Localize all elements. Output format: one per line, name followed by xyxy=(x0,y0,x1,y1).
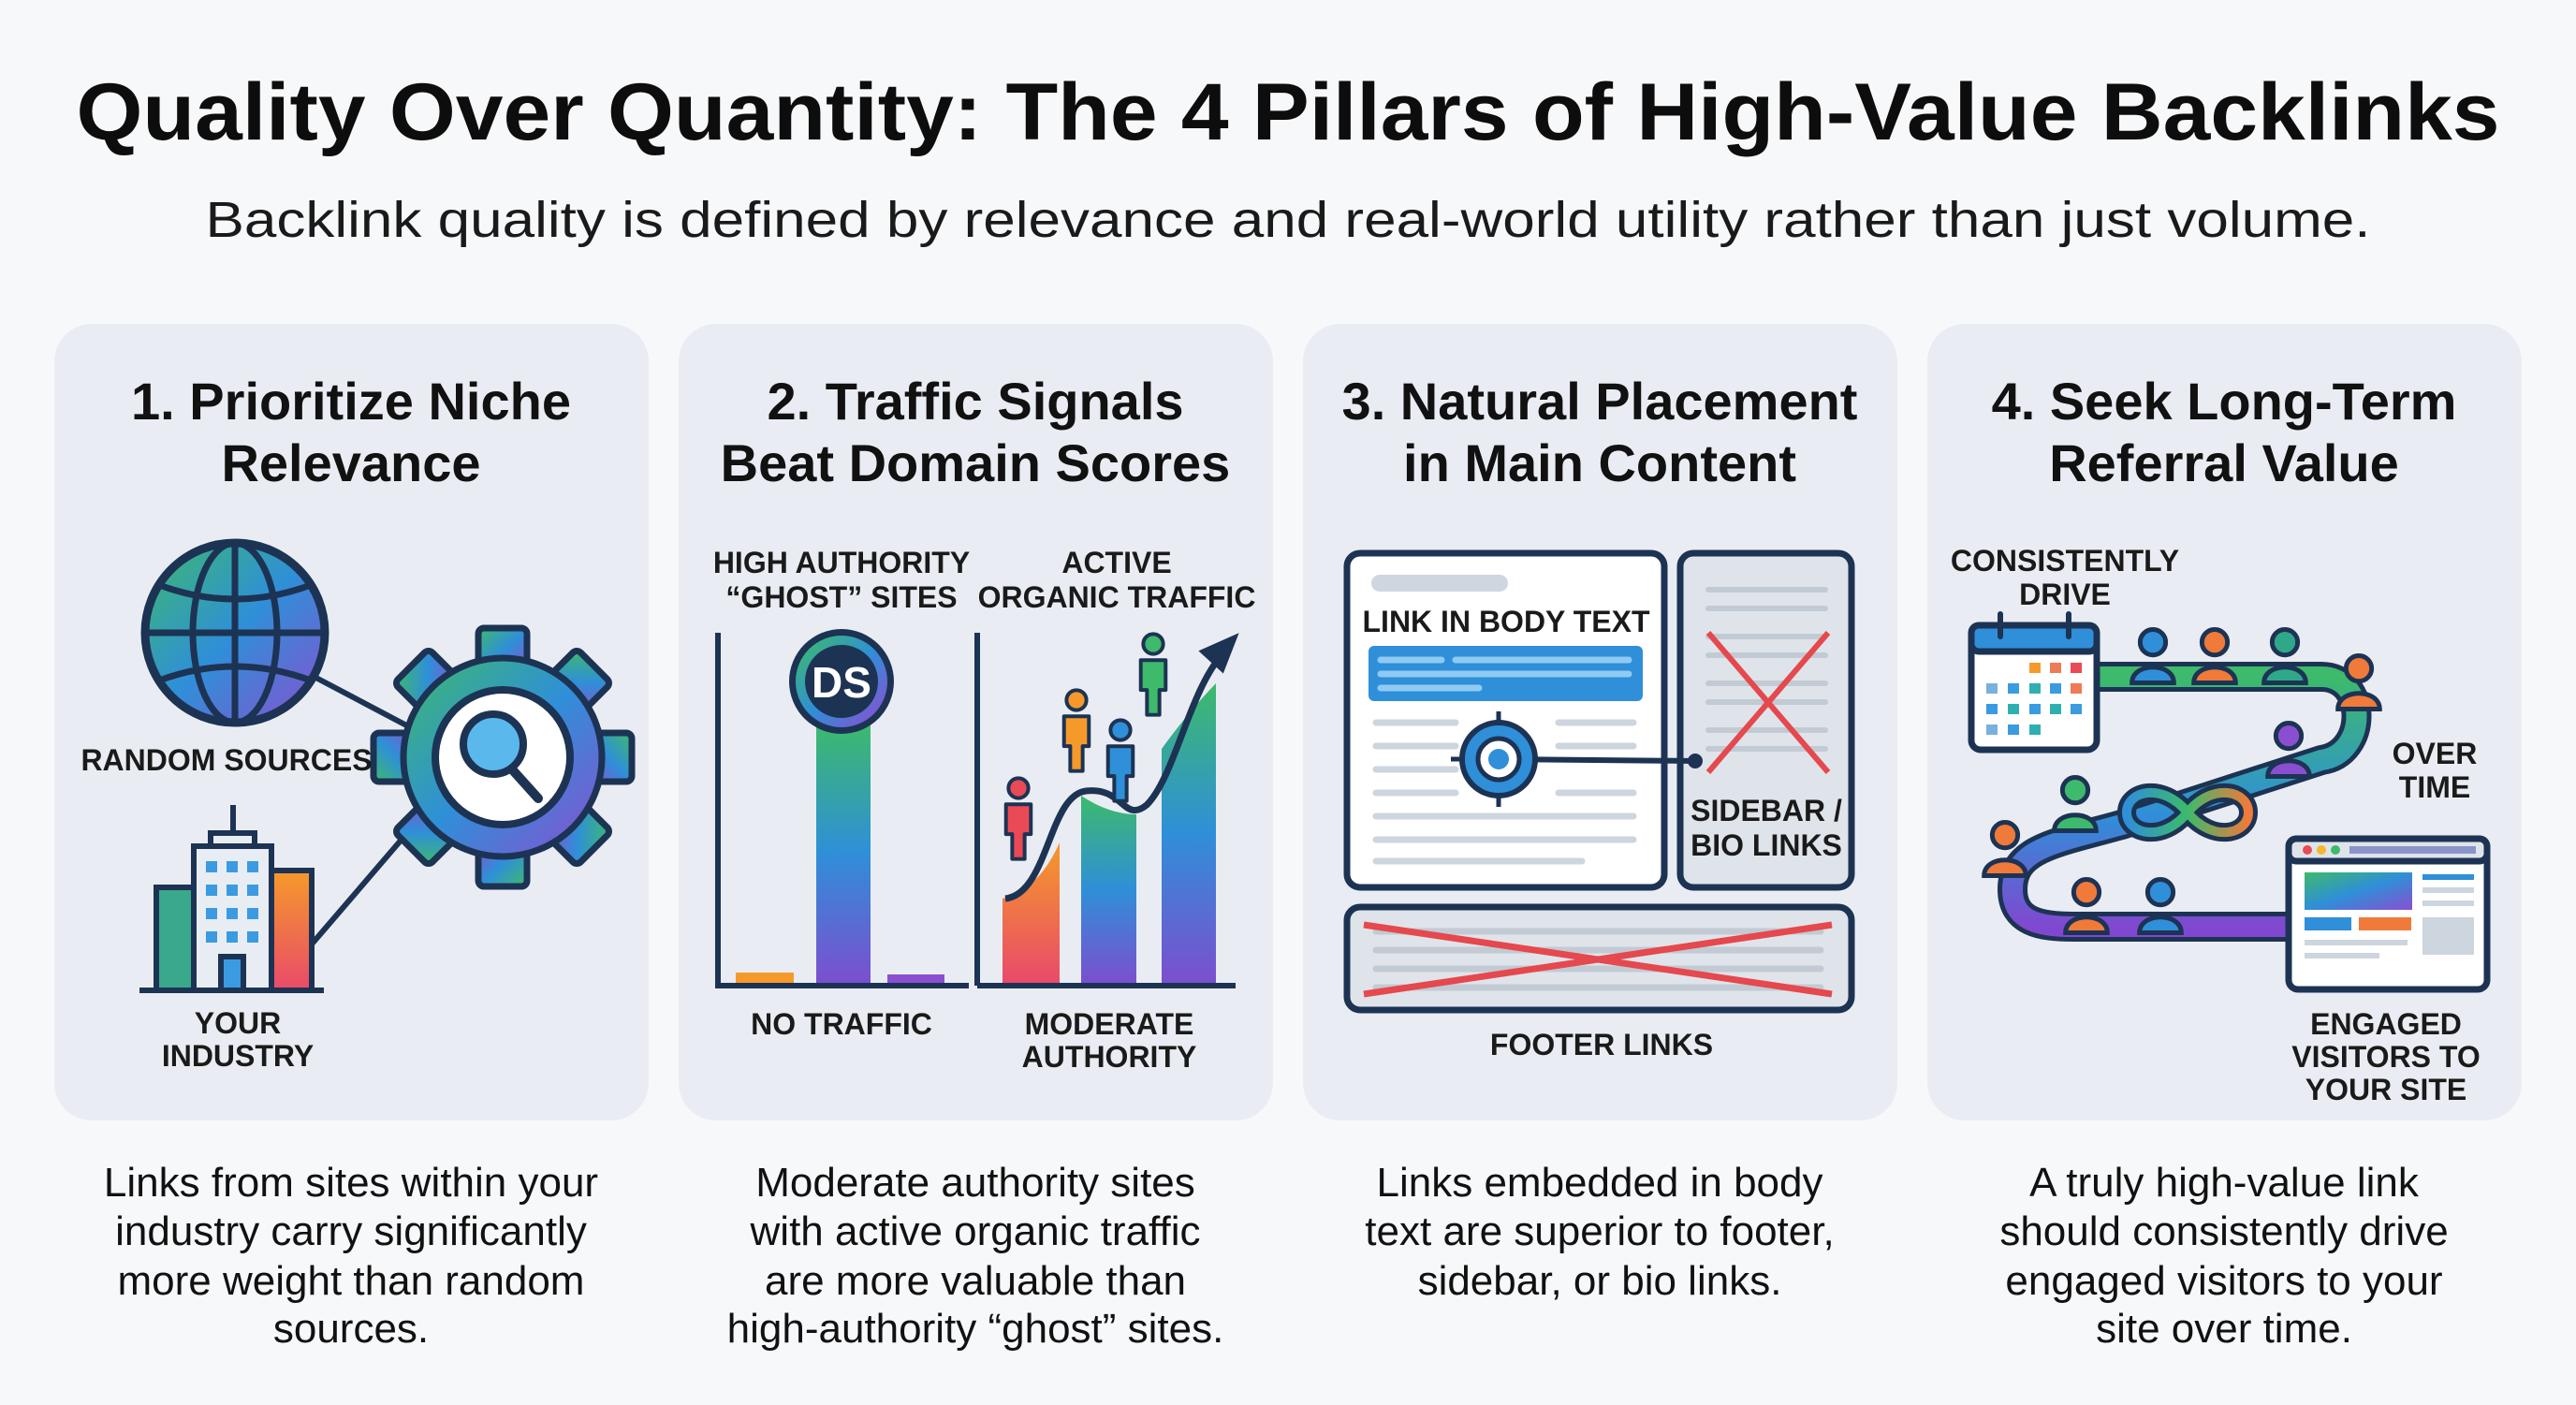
caption 4: engaged visitors to your xyxy=(2005,1258,2443,1304)
sidebar xyxy=(1680,553,1852,887)
heading 3: in Main Content xyxy=(1403,433,1796,492)
caption 3: Links embedded in body xyxy=(1376,1160,1823,1206)
heading 2: Beat Domain Scores xyxy=(721,433,1230,492)
caption 2: with active organic traffic xyxy=(750,1208,1200,1254)
labels top: “GHOST” SITES xyxy=(725,580,958,614)
icon: globe xyxy=(145,543,325,723)
caption 3: sidebar, or bio links. xyxy=(1418,1258,1781,1304)
chart: ghost sites xyxy=(715,629,969,986)
icon: infinity xyxy=(2127,793,2248,832)
labels bottom: NO TRAFFIC xyxy=(751,1007,932,1041)
icon: calendar xyxy=(1971,614,2097,750)
heading 2: 2. Traffic Signals xyxy=(767,372,1184,431)
caption 4: site over time. xyxy=(2096,1306,2352,1352)
labels bottom: AUTHORITY xyxy=(1022,1040,1196,1074)
panel: natural placement xyxy=(1303,324,1897,1304)
main document xyxy=(1347,553,1664,887)
sidebar: BIO LINKS xyxy=(1690,828,1842,862)
heading 4: 4. Seek Long-Term xyxy=(1992,372,2456,431)
title: Quality Over Quantity: The 4 Pillars of High-Value Backlinks xyxy=(77,67,2499,157)
heading 1: 1. Prioritize Niche xyxy=(131,372,571,431)
label: consistently drive: DRIVE xyxy=(2019,578,2111,611)
footer xyxy=(1347,907,1852,1010)
panel: traffic signals xyxy=(679,324,1273,1352)
labels top: HIGH AUTHORITY xyxy=(713,546,970,579)
heading 4 xyxy=(1992,372,2456,492)
labels top: ACTIVE xyxy=(1061,546,1172,579)
labels top: ORGANIC TRAFFIC xyxy=(978,580,1255,614)
track path xyxy=(2012,677,2357,927)
caption 2: are more valuable than xyxy=(765,1258,1186,1304)
icon: target with link xyxy=(1451,711,1703,807)
caption 1: industry carry significantly xyxy=(115,1208,587,1254)
label: over time xyxy=(2393,737,2477,804)
label: footer links: FOOTER LINKS xyxy=(1490,1028,1713,1061)
caption 2: Moderate authority sites xyxy=(755,1160,1195,1206)
labels bottom xyxy=(751,1007,1196,1074)
caption 1 xyxy=(104,1160,598,1352)
labels bottom: MODERATE xyxy=(1025,1007,1193,1041)
icon: building xyxy=(139,805,324,990)
caption 1: sources. xyxy=(273,1306,429,1352)
heading 1: Relevance xyxy=(221,433,481,492)
caption 1: more weight than random xyxy=(118,1258,584,1304)
caption 2: high-authority “ghost” sites. xyxy=(727,1306,1223,1352)
heading 1 xyxy=(131,372,571,492)
label: your industry xyxy=(162,1006,314,1073)
caption 4: A truly high-value link xyxy=(2029,1160,2420,1206)
heading 3 xyxy=(1342,372,1857,492)
caption 1: Links from sites within your xyxy=(104,1160,598,1206)
label: your industry: YOUR xyxy=(195,1006,281,1040)
label: engaged visitors: ENGAGED xyxy=(2310,1007,2462,1041)
label: engaged visitors xyxy=(2291,1007,2481,1106)
caption 3: text are superior to footer, xyxy=(1365,1208,1835,1254)
subtitle: Backlink quality is defined by relevance and real-world utility rather than just volume. xyxy=(206,192,2370,248)
caption 4 xyxy=(1999,1160,2449,1352)
main document: LINK IN BODY TEXT xyxy=(1363,605,1650,638)
icon: browser xyxy=(2289,839,2487,989)
panel: referral value xyxy=(1927,324,2522,1352)
people xyxy=(1006,778,1031,859)
sidebar: SIDEBAR / xyxy=(1690,794,1842,827)
heading 2 xyxy=(721,372,1230,492)
panel: niche relevance xyxy=(54,324,649,1352)
chart: ghost sites: DS xyxy=(812,658,871,707)
label: over time: TIME xyxy=(2399,770,2470,804)
label: consistently drive: CONSISTENTLY xyxy=(1951,544,2179,578)
people on track xyxy=(1984,629,2379,933)
label: consistently drive xyxy=(1951,544,2179,611)
label: your industry: INDUSTRY xyxy=(162,1039,314,1073)
icon: gear with magnifier xyxy=(373,628,632,886)
label: engaged visitors: VISITORS TO xyxy=(2291,1040,2481,1074)
label: over time: OVER xyxy=(2393,737,2477,770)
labels top xyxy=(713,546,1255,614)
caption 2 xyxy=(727,1160,1223,1352)
label: engaged visitors: YOUR SITE xyxy=(2305,1073,2466,1106)
caption 3 xyxy=(1365,1160,1835,1304)
heading 4: Referral Value xyxy=(2049,433,2399,492)
caption 4: should consistently drive xyxy=(1999,1208,2449,1254)
label: random sources: RANDOM SOURCES xyxy=(80,743,373,777)
connector lines xyxy=(304,674,412,953)
heading 3: 3. Natural Placement xyxy=(1342,372,1857,431)
chart: organic traffic xyxy=(977,633,1236,986)
